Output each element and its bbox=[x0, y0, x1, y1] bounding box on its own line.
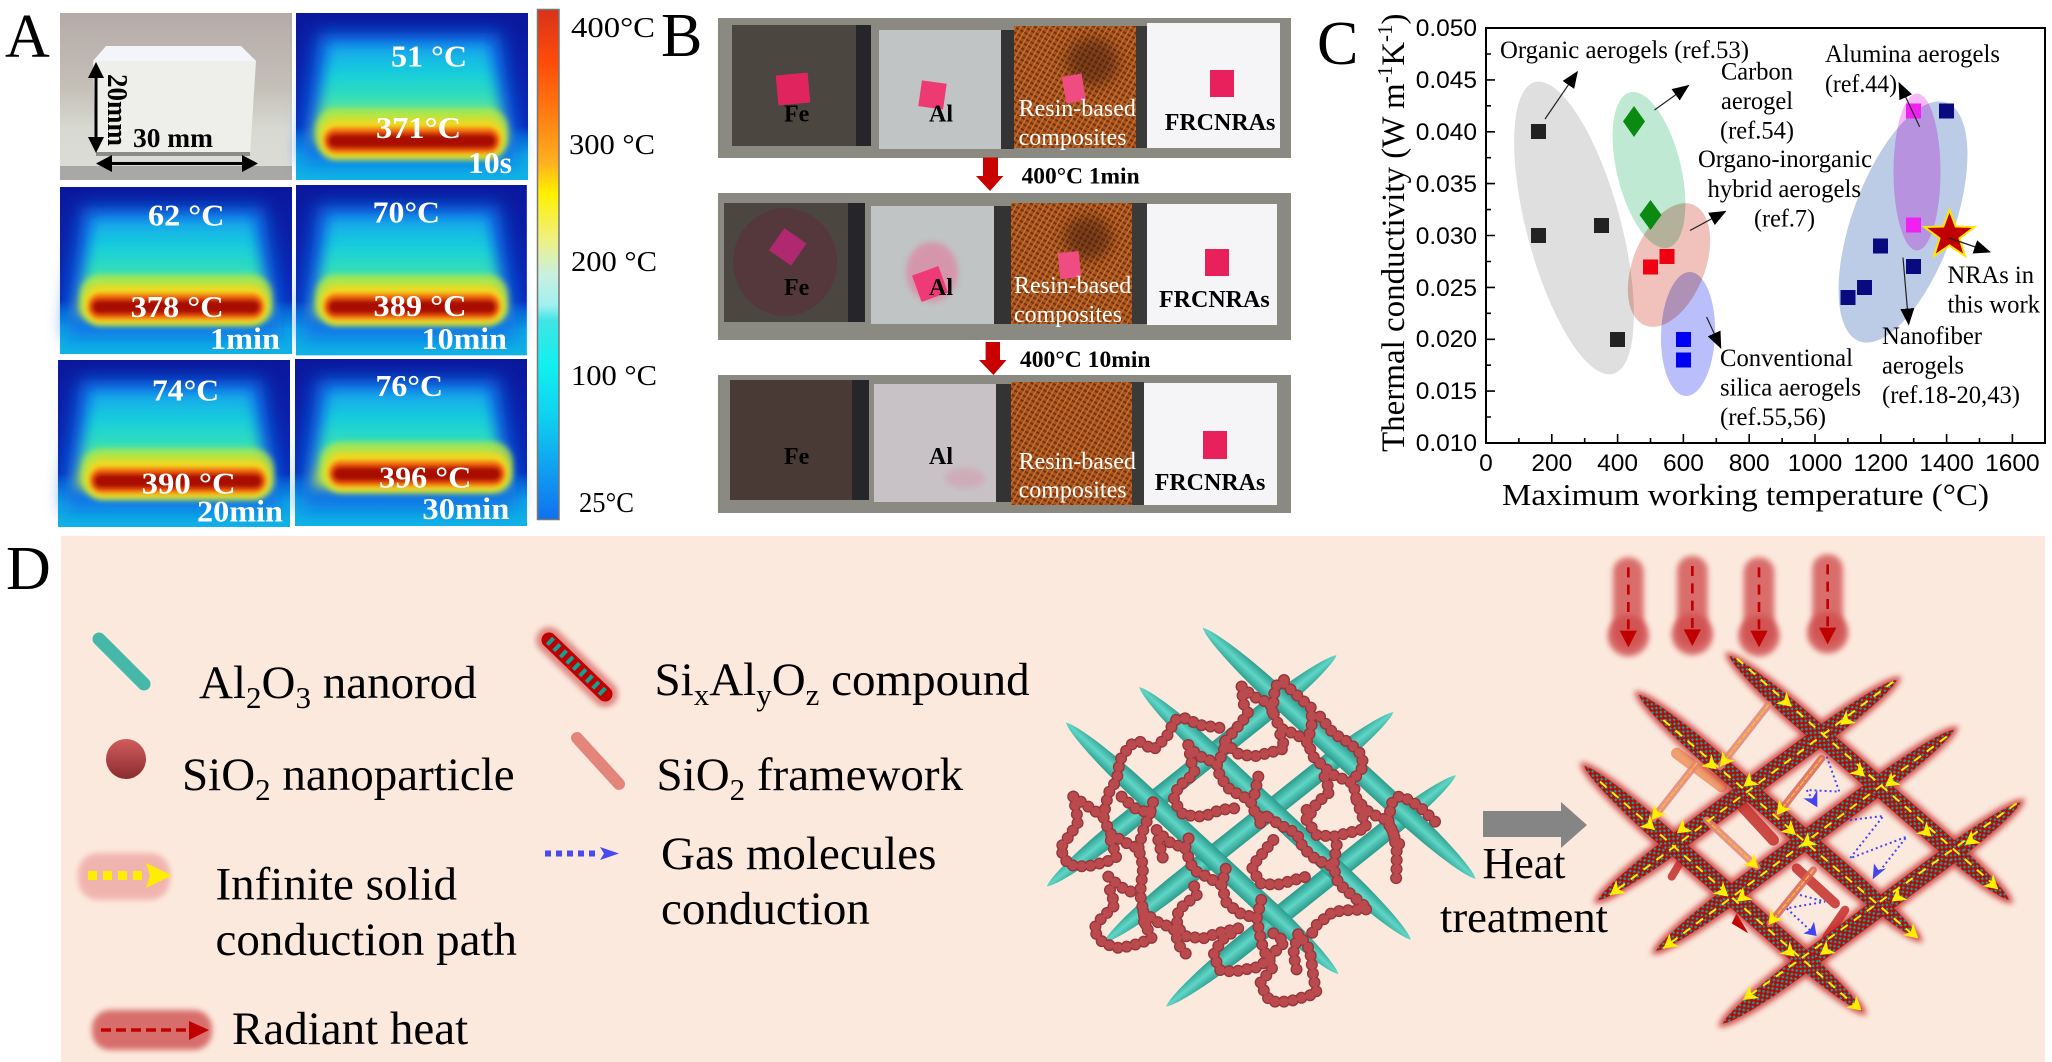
y axis title: -1 bbox=[1373, 66, 1397, 83]
thermal image 10s: 371°C bbox=[376, 110, 461, 145]
y axis tick labels: 0.010 bbox=[1416, 430, 1477, 457]
halo of compound rods bbox=[1578, 649, 2026, 1031]
alumina nanorods bbox=[1041, 621, 1482, 1014]
legend: SiO2 framework: 2 bbox=[730, 772, 745, 807]
panel D legend bbox=[78, 639, 1030, 1055]
series labels: Conventional bbox=[1720, 345, 1853, 372]
legend: SixAlyOz compound bbox=[549, 640, 1030, 712]
thermal image 10min bbox=[296, 185, 527, 356]
thermal image 20min bbox=[58, 360, 290, 529]
thermal image 10min: 70°C bbox=[373, 194, 440, 230]
legend: SiO2 nanoparticle: SiO bbox=[182, 749, 255, 801]
photo row 1: Fe bbox=[784, 102, 810, 128]
thermal image 30min: 396 °C bbox=[379, 460, 471, 494]
x axis tick labels: 600 bbox=[1663, 450, 1704, 477]
series labels: (ref.7) bbox=[1754, 206, 1815, 232]
panel letter A: A bbox=[5, 3, 50, 71]
annotation arrows bbox=[1545, 72, 1990, 348]
legend: SixAlyOz compound: z bbox=[806, 677, 819, 712]
series labels: NRAs in bbox=[1948, 262, 2034, 289]
photo row 3: Al bbox=[929, 444, 953, 470]
legend: Al2O3 nanorod: 2 bbox=[246, 680, 262, 715]
series labels: silica aerogels bbox=[1720, 374, 1861, 402]
legend: gas molecules conduction bbox=[545, 828, 936, 935]
photo row 3 bbox=[718, 375, 1291, 513]
legend: infinite solid conduction path bbox=[78, 853, 517, 966]
x axis tick labels: 200 bbox=[1531, 450, 1572, 477]
photo row 1 bbox=[718, 18, 1291, 158]
panel letter C: C bbox=[1317, 10, 1358, 78]
thermal image 1min: 62 °C bbox=[148, 198, 224, 232]
y axis tick labels bbox=[1416, 15, 1477, 457]
series labels: (ref.55,56) bbox=[1720, 404, 1826, 431]
arrow: heat treatment bbox=[1440, 802, 1608, 942]
photo row 2: Al bbox=[929, 275, 953, 301]
star: NRAs in this work bbox=[1924, 210, 1974, 256]
photo row 1: composites bbox=[1019, 125, 1127, 151]
legend: SiO2 nanoparticle bbox=[106, 739, 515, 807]
thermal image 20min: 74°C bbox=[152, 373, 219, 408]
photo row 1: Al bbox=[929, 102, 953, 128]
y axis tick labels: 0.025 bbox=[1416, 275, 1477, 302]
plot frame and ticks bbox=[1486, 28, 2045, 443]
y axis tick labels: 0.030 bbox=[1416, 223, 1477, 250]
x axis tick labels bbox=[1479, 450, 2040, 477]
y axis tick labels: 0.045 bbox=[1416, 67, 1477, 94]
gas conduction dotted paths bbox=[1787, 757, 1907, 933]
temperature colour bar: 400°C bbox=[571, 13, 655, 44]
series labels: hybrid aerogels bbox=[1708, 176, 1861, 203]
legend: Al2O3 nanorod bbox=[99, 639, 477, 715]
legend: Al2O3 nanorod: nanorod bbox=[311, 657, 477, 709]
solid conduction dashes bbox=[1600, 658, 2017, 1008]
data points bbox=[1531, 104, 1954, 368]
thermal image 10s: 51 °C bbox=[391, 39, 467, 74]
arrow: heat treatment: treatment bbox=[1440, 893, 1608, 942]
legend: SixAlyOz compound: x bbox=[694, 677, 710, 712]
x axis tick labels: 1400 bbox=[1919, 450, 1974, 477]
thermal image 1min: 1min bbox=[210, 321, 280, 356]
legend: SiO2 framework: SiO bbox=[656, 749, 730, 801]
x axis tick labels: 800 bbox=[1729, 450, 1770, 477]
radiant heat arrows bbox=[1608, 554, 1848, 656]
panel C: scatter chart bbox=[1373, 13, 2045, 512]
y axis title: ) bbox=[1376, 13, 1412, 24]
y axis tick labels: 0.020 bbox=[1416, 326, 1477, 353]
series labels: Nanofiber bbox=[1882, 323, 1983, 350]
arrow: 400°C 10min: 400°C 10min bbox=[1020, 347, 1151, 372]
y axis tick labels: 0.015 bbox=[1416, 378, 1477, 405]
y axis title: -1 bbox=[1373, 24, 1397, 42]
legend: radiant heat: Radiant heat bbox=[232, 1003, 468, 1055]
temperature colour bar: 200 °C bbox=[571, 247, 657, 278]
series labels: Alumina aerogels bbox=[1825, 41, 2000, 68]
legend: infinite solid conduction path: conduction path bbox=[216, 914, 517, 966]
legend: SixAlyOz compound: Si bbox=[654, 654, 694, 706]
series labels bbox=[1500, 37, 2040, 431]
x axis tick labels: 1200 bbox=[1854, 450, 1908, 477]
photo row 3: Resin-based bbox=[1019, 449, 1136, 475]
thermal image 10s bbox=[296, 13, 528, 180]
photo row 2: FRCNRAs bbox=[1159, 287, 1270, 313]
panel letter B: B bbox=[661, 2, 702, 70]
SixAlyOz compound rods bbox=[1578, 649, 2026, 1031]
photo row 3: Fe bbox=[784, 444, 810, 470]
y axis tick labels: 0.035 bbox=[1416, 171, 1477, 198]
sample photo with dimensions: 20mm bbox=[101, 74, 132, 146]
x axis tick labels: 0 bbox=[1479, 450, 1493, 477]
y axis tick labels: 0.050 bbox=[1416, 15, 1477, 42]
x axis tick labels: 400 bbox=[1597, 450, 1638, 477]
legend: Al2O3 nanorod: 3 bbox=[295, 680, 311, 715]
arrow: 400°C 1min: 400°C 1min bbox=[1022, 164, 1140, 189]
solid conduction arrowheads bbox=[1605, 691, 2004, 1017]
x axis title: Maximum working temperature (°C) bbox=[1502, 477, 1989, 512]
y axis title: K bbox=[1376, 42, 1412, 66]
legend: infinite solid conduction path: Infinite solid bbox=[216, 858, 457, 910]
y axis tick labels: 0.040 bbox=[1416, 119, 1477, 146]
legend: SiO2 nanoparticle: 2 bbox=[255, 772, 271, 807]
panel letter D: D bbox=[6, 535, 51, 603]
legend: SiO2 framework bbox=[577, 738, 964, 807]
arrow: 400°C 1min bbox=[976, 158, 1140, 191]
arrow: 400°C 10min bbox=[979, 342, 1151, 375]
gas arrowheads bbox=[1803, 790, 1886, 936]
framework links bbox=[1653, 705, 1822, 923]
arrow: heat treatment: Heat bbox=[1482, 839, 1566, 888]
diagram: network after heat treatment bbox=[1578, 554, 2026, 1031]
sample photo with dimensions: 30 mm bbox=[133, 123, 214, 153]
thermal image 1min: 378 °C bbox=[131, 289, 224, 324]
legend: radiant heat bbox=[92, 1003, 468, 1055]
series labels: (ref.18-20,43) bbox=[1882, 382, 2020, 409]
legend: SixAlyOz compound: O bbox=[772, 654, 806, 706]
thermal image 10s: 10s bbox=[468, 145, 512, 180]
photo row 1: Resin-based bbox=[1019, 96, 1136, 122]
legend: SixAlyOz compound: Al bbox=[709, 654, 756, 706]
thermal image 30min: 30min bbox=[422, 491, 509, 526]
sample photo with dimensions bbox=[60, 13, 292, 180]
legend: SixAlyOz compound: y bbox=[756, 677, 772, 712]
panel B: droplet test photos bbox=[718, 18, 1291, 513]
silica nanoparticle chains bbox=[1060, 680, 1435, 1002]
thermal image 1min bbox=[60, 187, 292, 356]
series labels: aerogel bbox=[1721, 88, 1793, 115]
legend: SiO2 framework: framework bbox=[745, 749, 964, 801]
legend: gas molecules conduction: Gas molecules bbox=[661, 828, 936, 880]
series labels: this work bbox=[1948, 292, 2040, 319]
y axis title: Thermal conductivity (W m bbox=[1376, 83, 1412, 452]
thermal image 20min: 390 °C bbox=[142, 466, 236, 501]
series labels: Organo-inorganic bbox=[1698, 146, 1872, 173]
series labels: (ref.44) bbox=[1825, 71, 1897, 98]
temperature colour bar: 25°C bbox=[579, 488, 634, 519]
photo row 2: Fe bbox=[784, 275, 810, 301]
x axis tick labels: 1600 bbox=[1985, 450, 2040, 477]
photo row 3: composites bbox=[1019, 478, 1127, 504]
diagram: network before heat treatment bbox=[1041, 621, 1482, 1014]
thermal image 30min bbox=[295, 359, 527, 526]
photo row 1: FRCNRAs bbox=[1165, 110, 1275, 136]
temperature colour bar: 100 °C bbox=[571, 361, 657, 392]
shaded material ellipses bbox=[1490, 70, 1994, 397]
x axis tick labels: 1000 bbox=[1788, 450, 1842, 477]
legend: SiO2 nanoparticle: nanoparticle bbox=[271, 749, 515, 801]
thermal image 10min: 389 °C bbox=[374, 288, 466, 323]
legend: Al2O3 nanorod: Al bbox=[199, 657, 246, 709]
photo row 3: FRCNRAs bbox=[1155, 470, 1265, 496]
legend: Al2O3 nanorod: O bbox=[262, 657, 295, 709]
panel A: photo and thermal images bbox=[58, 13, 528, 529]
residual framework rods bbox=[1672, 753, 1845, 937]
legend: gas molecules conduction: conduction bbox=[661, 883, 870, 935]
legend: SixAlyOz compound: compound bbox=[819, 654, 1030, 706]
thermal image 20min: 20min bbox=[197, 494, 283, 529]
thermal image 30min: 76°C bbox=[376, 368, 443, 403]
thermal image 10min: 10min bbox=[422, 321, 507, 356]
series labels: aerogels bbox=[1882, 352, 1964, 380]
series labels: Carbon bbox=[1721, 58, 1793, 85]
temperature colour bar bbox=[538, 10, 657, 520]
temperature colour bar: 300 °C bbox=[569, 130, 655, 161]
series labels: Organic aerogels (ref.53) bbox=[1500, 37, 1749, 64]
series labels: (ref.54) bbox=[1720, 118, 1794, 145]
panel D: mechanism background bbox=[61, 536, 2045, 1062]
photo row 2: composites bbox=[1014, 302, 1122, 328]
photo row 2: Resin-based bbox=[1014, 273, 1131, 299]
photo row 2 bbox=[718, 193, 1291, 340]
